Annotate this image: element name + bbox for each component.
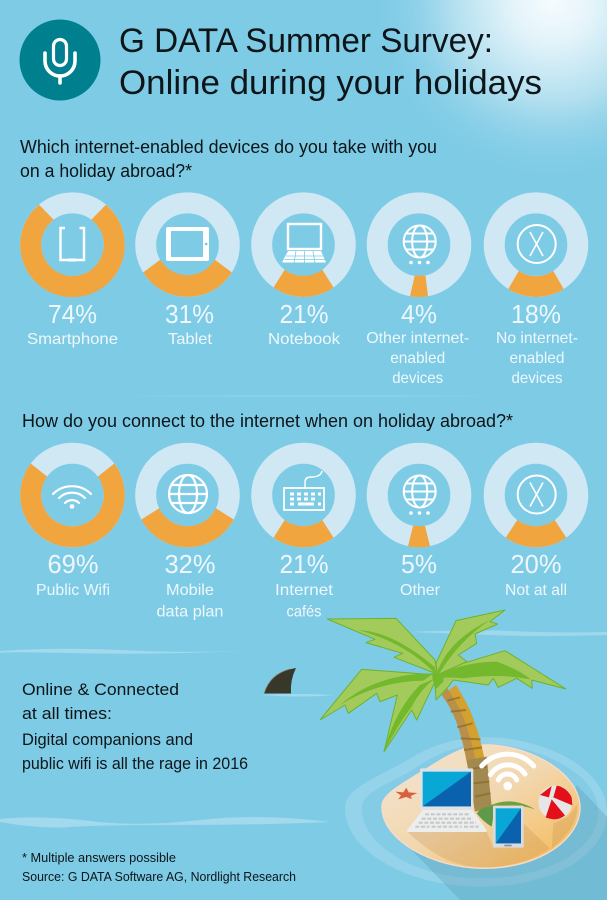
label bbox=[496, 330, 578, 387]
palm fronds bbox=[320, 610, 566, 752]
label: No internet- bbox=[496, 330, 578, 347]
water ripples bbox=[345, 737, 607, 887]
label: Public Wifi bbox=[36, 582, 110, 599]
donut: smartphone 74% bbox=[20, 203, 125, 348]
icon: microphone badge bbox=[20, 20, 100, 100]
value: 18% bbox=[511, 299, 561, 329]
donut: notebook 21% bbox=[262, 203, 345, 348]
text block: online and connected: Digital companions and bbox=[22, 731, 193, 749]
donut: no devices 18% bbox=[494, 203, 578, 387]
value: 21% bbox=[280, 299, 328, 329]
tablet bbox=[493, 806, 524, 848]
footnote and source: * Multiple answers possible bbox=[22, 851, 176, 865]
laptop bbox=[407, 768, 487, 832]
label bbox=[366, 330, 469, 387]
title: Online during your holidays bbox=[119, 64, 542, 102]
label bbox=[156, 582, 224, 620]
icon: tablet bbox=[166, 227, 209, 261]
label: devices bbox=[512, 370, 562, 387]
label: Mobile bbox=[166, 582, 214, 599]
label: Smartphone bbox=[27, 331, 118, 348]
text block: online and connected bbox=[22, 681, 248, 773]
label: enabled bbox=[510, 350, 564, 367]
label bbox=[275, 582, 334, 620]
donut: other devices 4% bbox=[366, 203, 469, 387]
island bbox=[382, 745, 580, 868]
icon: notebook bbox=[282, 224, 326, 263]
grass bbox=[477, 801, 535, 827]
icon: globe with dots bbox=[404, 476, 436, 515]
value: 5% bbox=[401, 549, 437, 579]
heading: devices question: Which internet-enabled devices do you take with you bbox=[20, 137, 437, 157]
icon: globe with dots bbox=[404, 226, 436, 264]
label: cafés bbox=[286, 604, 322, 620]
value: 20% bbox=[510, 549, 562, 579]
heading: devices question: on a holiday abroad?* bbox=[20, 161, 192, 181]
value: 31% bbox=[165, 299, 214, 329]
donut: internet cafes 21% bbox=[262, 453, 345, 620]
panel: connection chart row bbox=[20, 453, 578, 620]
text block: online and connected: Online & Connected bbox=[22, 681, 179, 699]
value: 21% bbox=[280, 549, 328, 579]
heading: connection question: How do you connect to the internet when on holiday abroad?* bbox=[22, 411, 513, 431]
donut: mobile data 32% bbox=[141, 453, 234, 620]
value: 69% bbox=[48, 549, 98, 579]
illustration: palm island bbox=[320, 610, 607, 900]
panel: devices chart row bbox=[20, 203, 578, 387]
text block: online and connected: public wifi is all the rage in 2016 bbox=[22, 755, 248, 773]
icon: smartphone bbox=[60, 228, 84, 260]
title: G DATA Summer Survey: bbox=[119, 22, 493, 60]
icon: keyboard bbox=[284, 471, 324, 510]
value: 74% bbox=[48, 299, 97, 329]
beach ball bbox=[538, 785, 572, 819]
label: Internet bbox=[275, 582, 334, 599]
icon: crossed circle bbox=[518, 225, 556, 263]
trunk bbox=[442, 685, 492, 812]
label: data plan bbox=[156, 604, 224, 620]
footnote and source bbox=[22, 851, 296, 884]
label: Other internet- bbox=[366, 330, 469, 347]
long shadow bbox=[410, 785, 607, 900]
label: Other bbox=[400, 582, 441, 599]
donut: not at all 20% bbox=[494, 453, 578, 599]
donut: tablet 31% bbox=[143, 203, 232, 348]
footnote and source: Source: G DATA Software AG, Nordlight Research bbox=[22, 870, 296, 884]
text block: online and connected: at all times: bbox=[22, 705, 112, 723]
value: 32% bbox=[164, 549, 216, 579]
donut: public wifi 69% bbox=[20, 453, 125, 599]
label: Not at all bbox=[505, 582, 567, 599]
label: enabled bbox=[390, 350, 445, 367]
wifi symbol bbox=[482, 754, 534, 790]
icon: wifi bbox=[53, 486, 91, 509]
icon: crossed circle bbox=[518, 476, 556, 514]
label: devices bbox=[392, 370, 443, 387]
item shadows bbox=[407, 805, 577, 867]
starfish bbox=[395, 788, 417, 799]
donut: other 5% bbox=[377, 453, 461, 599]
title bbox=[119, 22, 542, 102]
label: Tablet bbox=[168, 331, 213, 348]
icon: shark fin bbox=[260, 668, 335, 696]
value: 4% bbox=[401, 299, 437, 329]
heading: devices question bbox=[20, 137, 437, 181]
label: Notebook bbox=[268, 331, 341, 348]
icon: globe bbox=[169, 475, 207, 513]
